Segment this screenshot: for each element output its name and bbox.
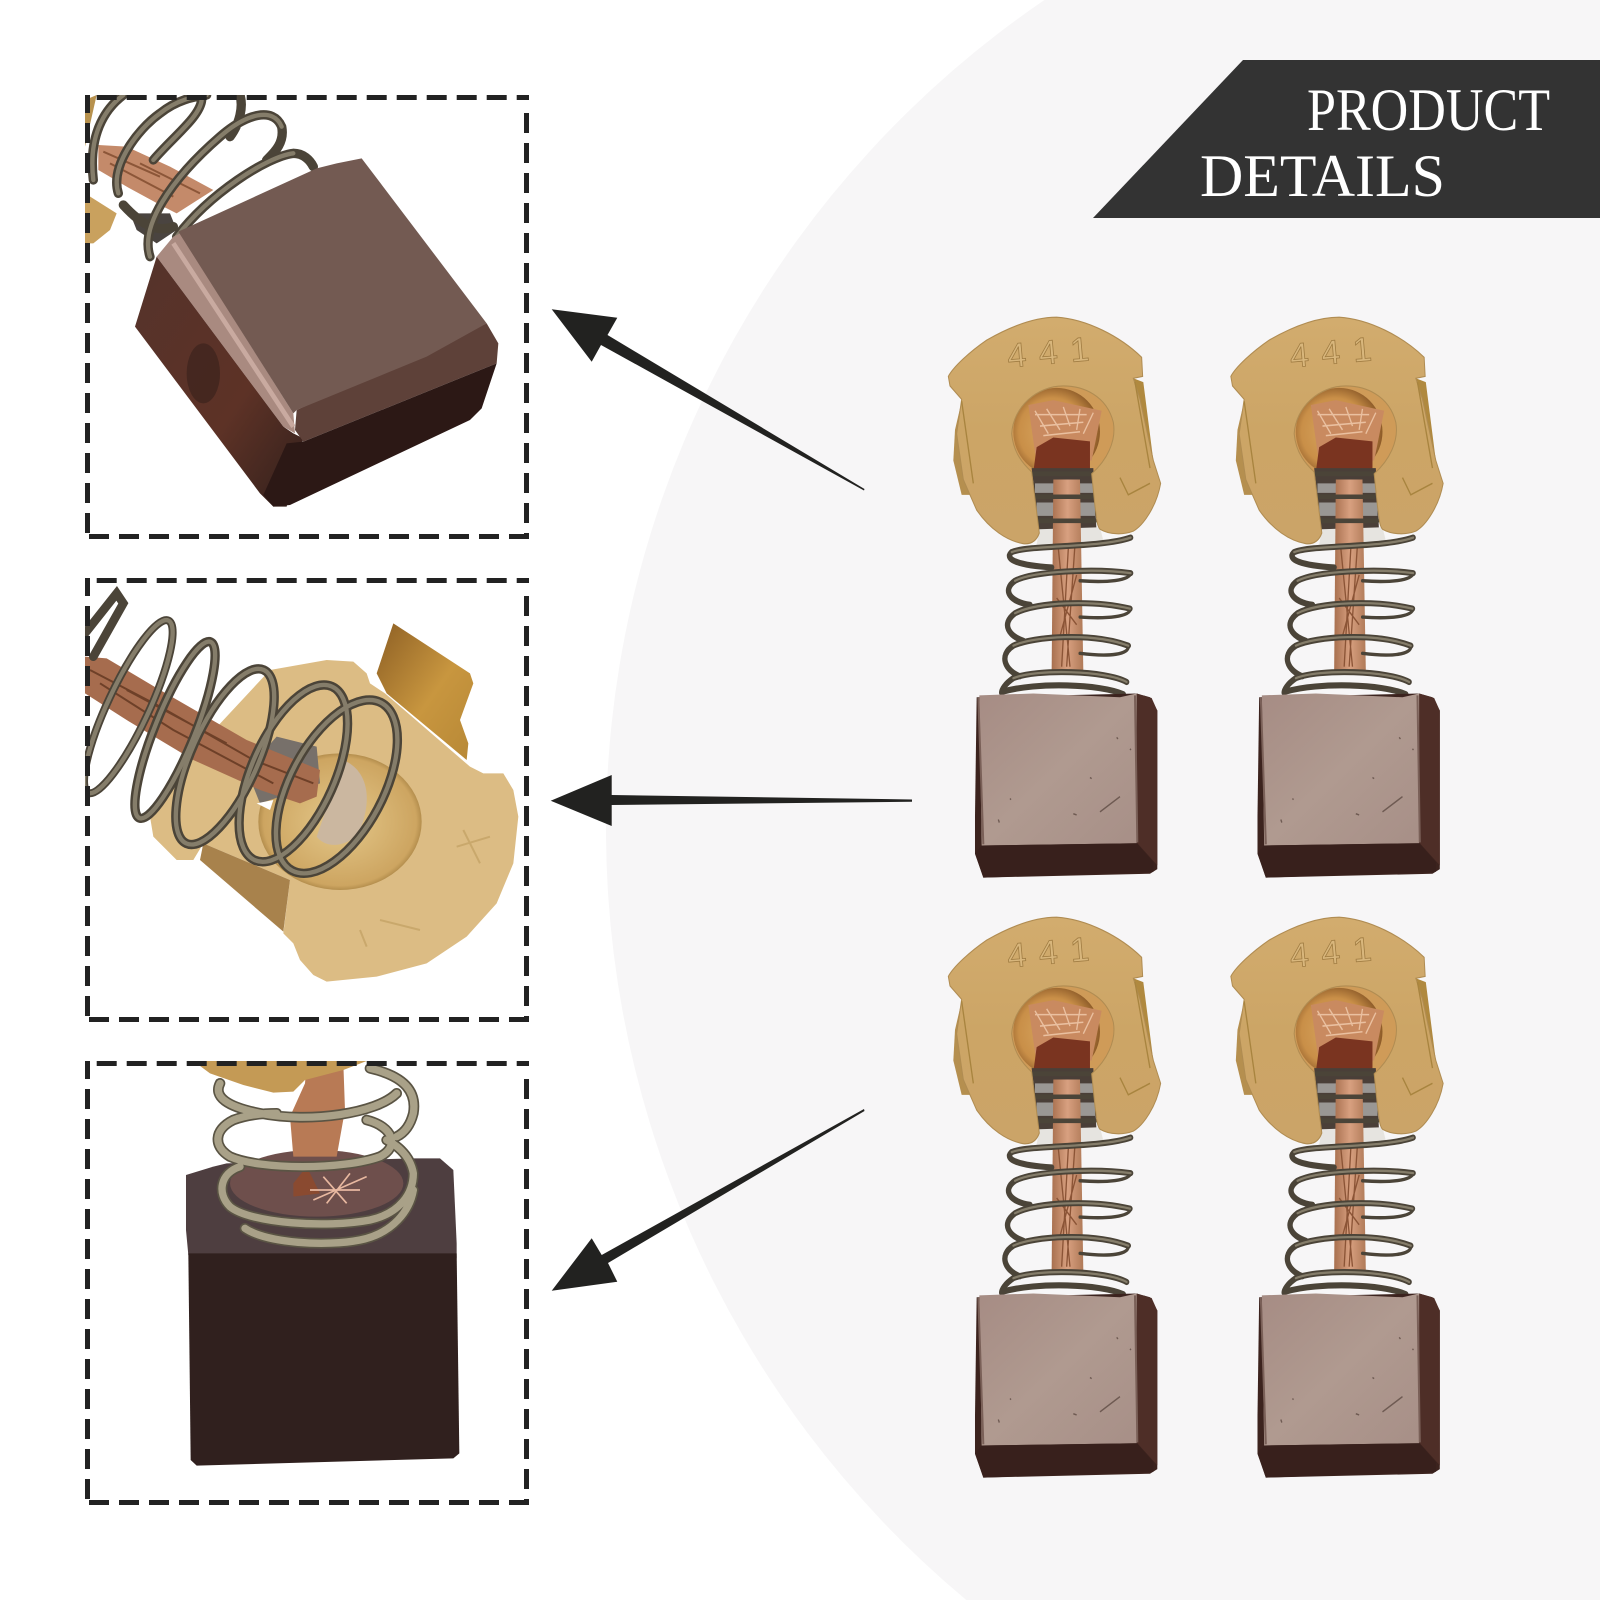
product: brush bottom left: 441 <box>1006 930 1091 975</box>
banner: product details: DETAILS <box>1200 143 1445 209</box>
dashed frame: middle detail <box>88 578 529 1022</box>
product: brush top left: 441 <box>1006 330 1091 375</box>
product: brush top right <box>1231 317 1443 878</box>
product: brush top right: 441 <box>1288 330 1373 375</box>
panel: detail of brass plate and spring <box>69 593 518 982</box>
arrow: to top detail <box>552 309 864 490</box>
product: brush bottom left <box>948 917 1161 1478</box>
dashed frame: top detail <box>88 95 529 539</box>
product: brush bottom right <box>1231 917 1443 1478</box>
panel: detail of carbon block <box>85 95 498 507</box>
banner: product details: PRODUCT <box>1307 77 1550 143</box>
banner: product details <box>1093 60 1600 218</box>
arrow: to middle detail <box>551 775 912 826</box>
background: pale grey circle <box>606 0 1600 1600</box>
product: brush top left <box>948 317 1161 878</box>
product: brush bottom right: 441 <box>1288 930 1373 975</box>
dashed frame: bottom detail <box>88 1061 529 1505</box>
arrow: to bottom detail <box>552 1109 864 1291</box>
panel: side view of block and spring <box>186 1061 459 1466</box>
